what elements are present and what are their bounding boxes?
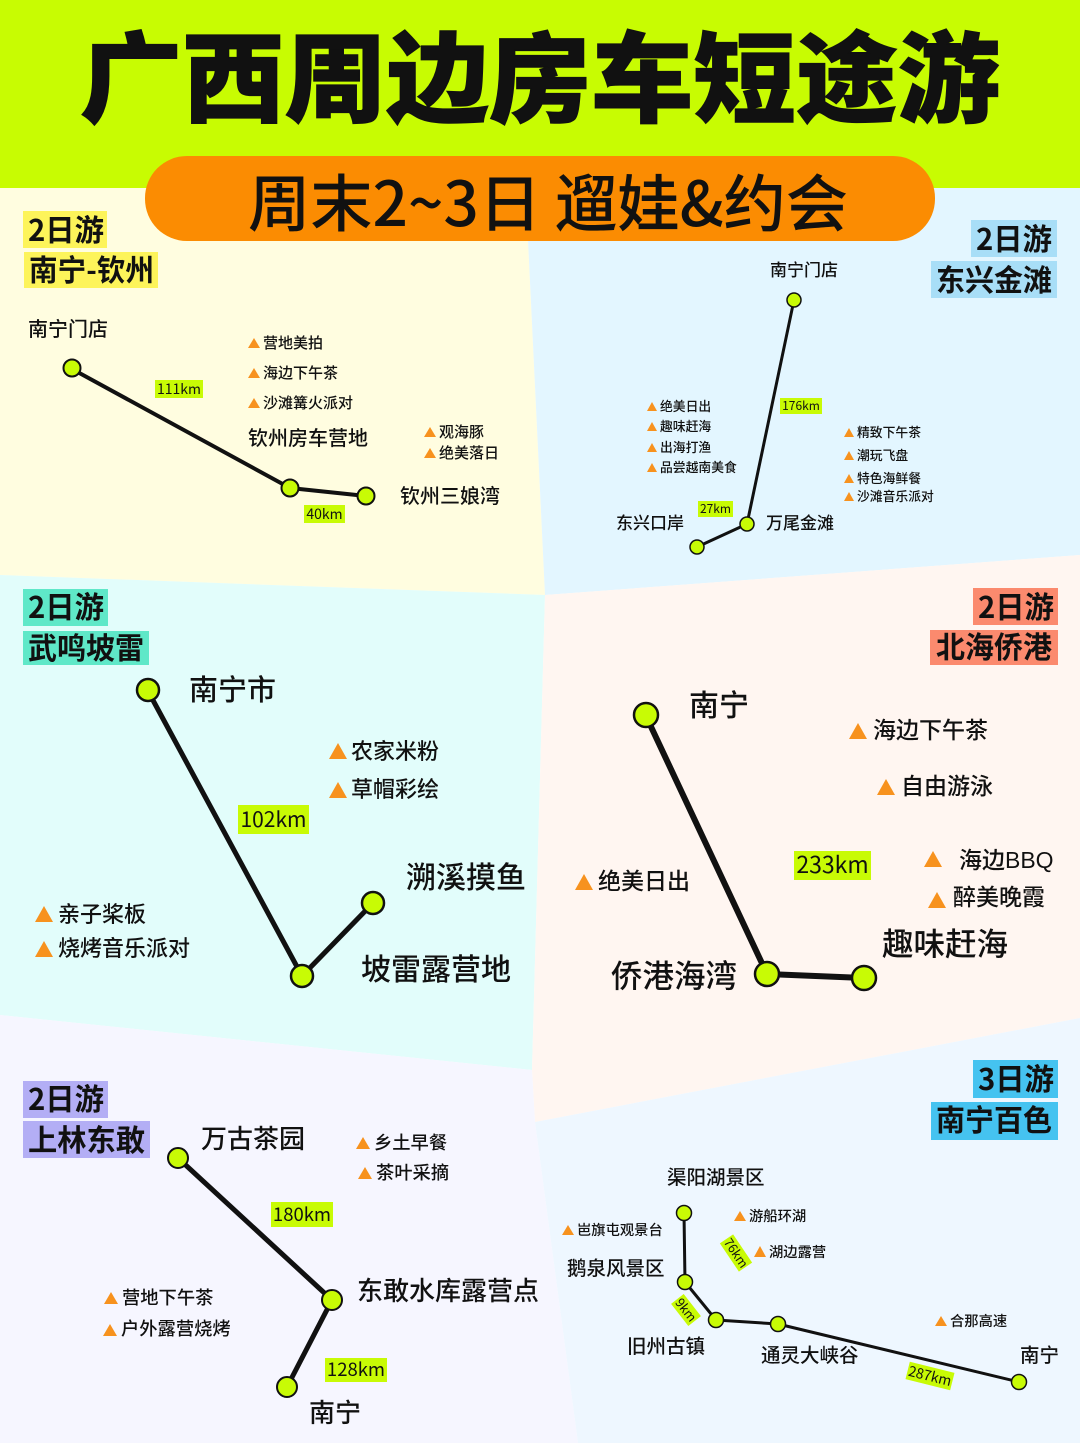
activities: 趣味赶海	[660, 419, 711, 434]
activities: 绝美日出	[598, 868, 690, 894]
panel: Dongxing route	[616, 215, 1057, 554]
activities: 岜旗屯观景台	[577, 1221, 663, 1239]
route line	[684, 1213, 1019, 1382]
route stops	[137, 679, 384, 987]
activities: 海边下午茶	[873, 717, 988, 743]
panel: Shanglin route	[23, 1075, 539, 1428]
route line	[72, 369, 366, 496]
activities: 沙滩音乐派对	[857, 489, 934, 504]
place labels: 侨港海湾	[611, 958, 737, 994]
panel: Shanglin background	[0, 1015, 578, 1443]
place labels	[567, 1167, 1059, 1367]
distance: 176km: 176km	[782, 397, 820, 414]
title: 广西周边房车短途游	[80, 1, 1000, 143]
distance: 9km: 9km	[671, 1294, 702, 1325]
subtitle pill: 周末2~3日 遛娃&约会	[248, 154, 848, 244]
tag: route name: 南宁-钦州	[29, 246, 154, 290]
activities: 农家米粉	[351, 739, 439, 764]
distance: 102km: 102km	[240, 804, 307, 834]
tag: 3 day trip: 3日游	[978, 1055, 1054, 1099]
activities	[248, 334, 499, 462]
activities: 草帽彩绘	[351, 777, 439, 802]
activities: 出海打渔	[660, 440, 711, 455]
place labels: 万古茶园	[201, 1124, 305, 1154]
place labels: 东敢水库露营点	[357, 1276, 539, 1306]
route stops	[168, 1148, 342, 1397]
tag: 2 day trip: 2日游	[28, 1075, 104, 1119]
activities: 营地下午茶	[122, 1287, 213, 1308]
panel: Baise background	[535, 1018, 1080, 1443]
place labels: 渠阳湖景区	[667, 1167, 765, 1189]
place labels: 南宁市	[189, 674, 276, 707]
tag: route name: 北海侨港	[936, 623, 1052, 667]
route stops	[676, 1206, 1026, 1390]
distance: 180km: 180km	[273, 1201, 331, 1227]
activities	[562, 1208, 1007, 1330]
place labels: 鹅泉风景区	[567, 1258, 665, 1280]
tag: 2 day trip: 2日游	[28, 583, 104, 627]
distance: 111km: 111km	[157, 379, 201, 399]
route stops	[634, 703, 876, 990]
place labels: 趣味赶海	[882, 926, 1008, 962]
place labels: 坡雷露营地	[361, 954, 511, 987]
tag: 2 day trip: 2日游	[28, 206, 104, 250]
place labels	[201, 1124, 539, 1428]
activities	[647, 399, 934, 504]
place labels: 钦州三娘湾	[400, 484, 500, 508]
distance: 40km: 40km	[306, 504, 343, 524]
activities: 潮玩飞盘	[857, 448, 908, 463]
route stops	[690, 293, 801, 554]
activities: 茶叶采摘	[376, 1162, 449, 1183]
place labels	[189, 674, 526, 987]
tag: route name: 武鸣坡雷	[28, 624, 144, 668]
place labels: 通灵大峡谷	[761, 1345, 859, 1367]
activities: 自由游泳	[901, 773, 993, 799]
place labels: 南宁门店	[770, 261, 838, 280]
place labels: 万尾金滩	[766, 513, 834, 533]
activities: 观海豚	[439, 424, 484, 441]
distance: 27km: 27km	[700, 500, 731, 517]
place labels: 东兴口岸	[616, 514, 684, 533]
activities	[35, 739, 439, 961]
place labels	[611, 690, 1008, 994]
activities: 亲子桨板	[58, 902, 146, 927]
panel: Wuming background	[0, 575, 545, 1070]
place labels	[616, 261, 838, 533]
activities: 湖边露营	[769, 1243, 826, 1261]
distance: 76km: 76km	[720, 1234, 754, 1271]
tag: route name: 上林东敢	[28, 1116, 145, 1160]
activities: 烧烤音乐派对	[58, 936, 190, 961]
place labels: 钦州房车营地	[248, 427, 368, 450]
activities: 游船环湖	[749, 1208, 806, 1225]
distance: 287km: 287km	[906, 1361, 954, 1391]
panel: Wuming route	[23, 583, 526, 987]
tag: 2 day trip: 2日游	[976, 215, 1052, 259]
distance: 233km: 233km	[796, 846, 869, 880]
activities: 合那高速	[950, 1313, 1007, 1330]
activities: 绝美日出	[660, 399, 711, 414]
activities: 精致下午茶	[857, 425, 921, 440]
activities	[103, 1132, 449, 1339]
panel: Beihai route	[575, 583, 1058, 994]
panel: Nanning-Qinzhou route	[23, 206, 500, 524]
place labels: 旧州古镇	[627, 1336, 705, 1358]
place labels: 南宁	[1020, 1345, 1059, 1367]
activities: 品尝越南美食	[660, 460, 737, 475]
activities: 绝美落日	[439, 444, 499, 462]
route line	[646, 716, 864, 978]
panel: Baise route	[562, 1055, 1059, 1391]
activities: 沙滩篝火派对	[263, 394, 353, 412]
route stops	[64, 360, 374, 504]
activities: 特色海鲜餐	[857, 471, 921, 486]
place labels: 南宁	[689, 690, 749, 723]
activities: 户外露营烧烤	[121, 1318, 231, 1339]
panel: Dongxing background	[528, 188, 1080, 595]
route line	[178, 1158, 332, 1387]
route line	[697, 300, 794, 547]
route line	[148, 691, 373, 976]
tag: 2 day trip: 2日游	[978, 583, 1054, 627]
panel: Beihai background	[532, 555, 1080, 1122]
activities: 醉美晚霞	[953, 884, 1045, 910]
place labels: 溯溪摸鱼	[406, 862, 526, 895]
tag: route name: 东兴金滩	[936, 256, 1052, 300]
place labels	[28, 318, 500, 508]
header band	[0, 0, 1080, 188]
tag: route name: 南宁百色	[936, 1096, 1052, 1140]
place labels: 南宁	[309, 1398, 361, 1428]
activities: 海边下午茶	[263, 364, 338, 382]
panel: Nanning-Qinzhou background	[0, 188, 545, 595]
activities: 营地美拍	[263, 334, 323, 352]
activities: 乡土早餐	[374, 1132, 447, 1153]
activities	[575, 717, 1054, 910]
distance: 128km: 128km	[327, 1356, 385, 1382]
activities: 海边BBQ	[959, 847, 1054, 873]
place labels: 南宁门店	[28, 318, 108, 341]
